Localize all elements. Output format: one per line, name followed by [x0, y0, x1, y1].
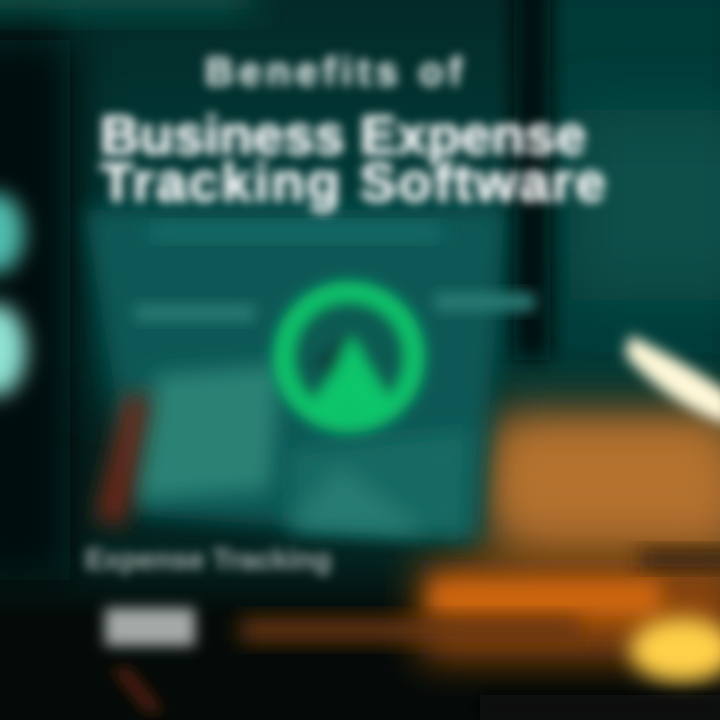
- device left edge: red-brown: [95, 395, 150, 525]
- caption text: Expense Tracking: [85, 544, 332, 576]
- left edge teal circles: [0, 193, 26, 396]
- lamp highlight: [625, 335, 720, 425]
- title: main heading: [93, 104, 612, 222]
- title: main heading: Tracking Software: [100, 151, 608, 213]
- orange glow area: [240, 420, 720, 720]
- panel: teal screen: [85, 210, 535, 540]
- footer logo: [105, 608, 195, 646]
- title: small heading: Benefits of: [205, 50, 467, 94]
- icon: green gauge ring: [283, 291, 415, 423]
- title: main heading: Business Expense: [100, 104, 586, 166]
